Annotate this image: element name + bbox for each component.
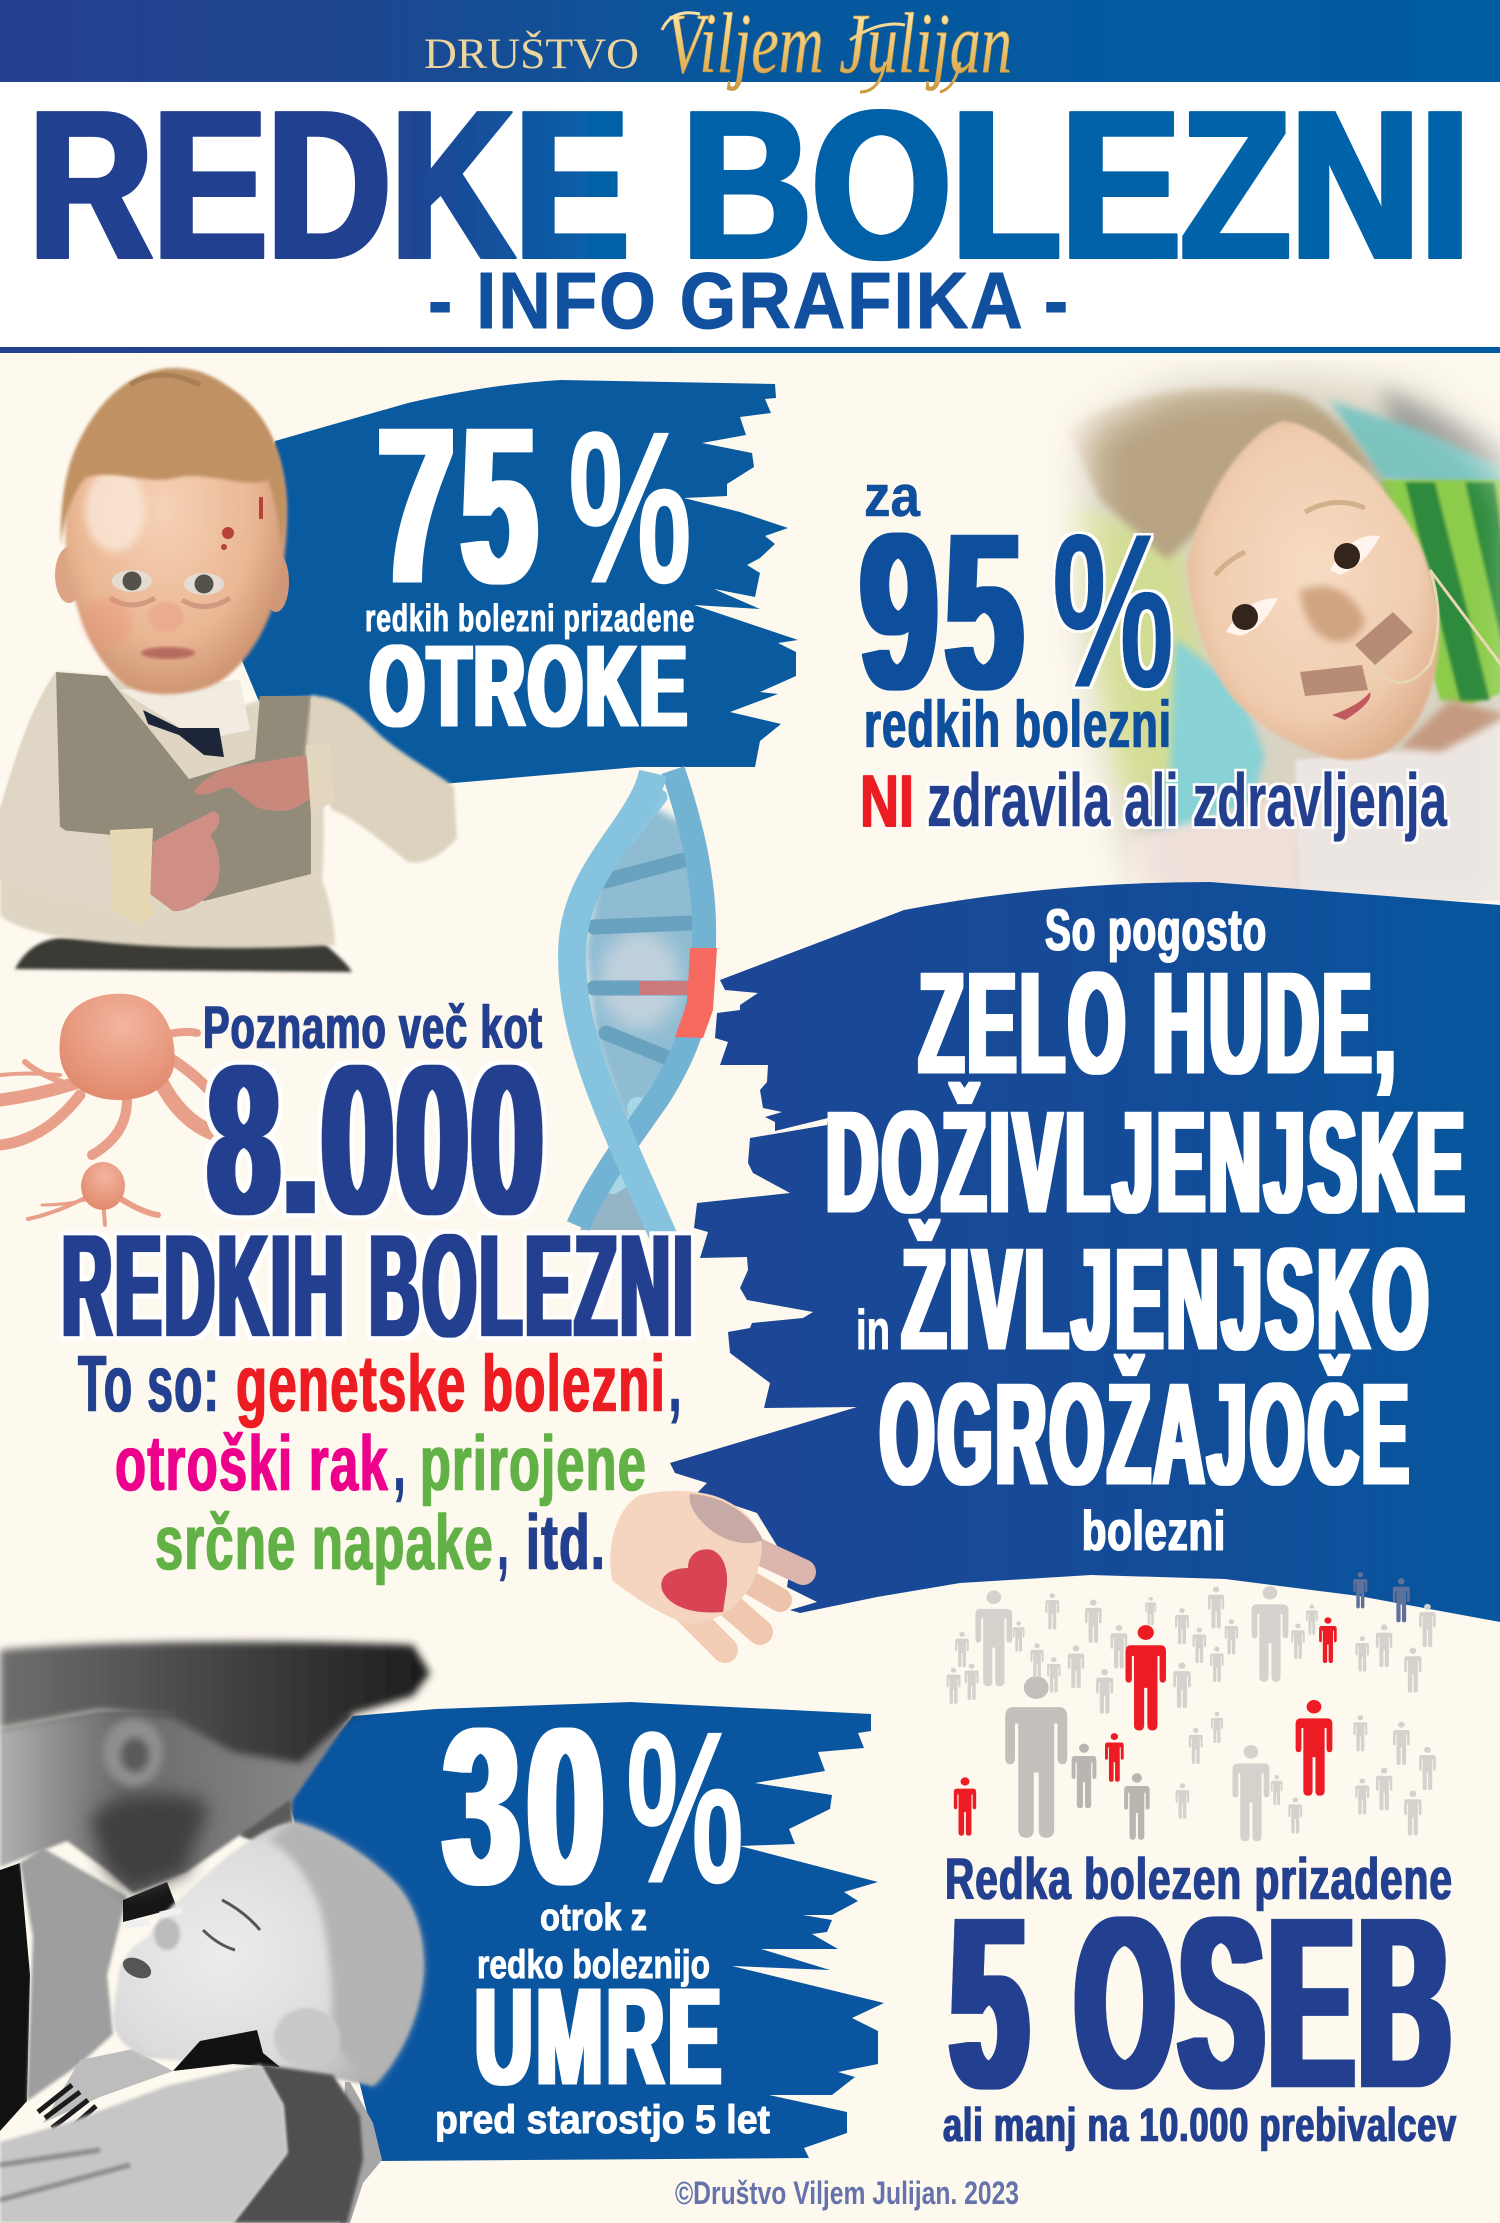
list line 3: srčne napake [155,1498,494,1586]
text block: 8.000 rare diseases [62,994,696,1586]
white title panel [0,82,1500,354]
palm [610,1491,762,1625]
mutated DNA segment [675,948,717,1038]
number: 5: 5 [951,1866,1027,2139]
mouth [141,647,195,659]
hair [0,1642,430,1763]
helix interior [585,800,703,1125]
thumb shadow [690,1494,763,1543]
man's forearm [233,2064,363,2223]
NI: NI [860,762,914,842]
list line 3: itd. [526,1498,606,1586]
teal blanket top [1330,400,1500,490]
black shirt [0,1863,30,2131]
large cell [0,994,213,1155]
eyes [112,570,224,595]
red figures [954,1617,1337,1836]
caption: redkih bolezni [864,687,1172,761]
illustration: cancer cells [0,994,213,1225]
hands [194,755,311,811]
DNA rungs [594,797,690,1183]
main title [29,66,1470,303]
illustration: hand holding heart [610,1491,803,1650]
eyes [1226,536,1380,636]
nose [148,602,184,632]
label: Poznamo več kot: Poznamo več kot [203,994,543,1061]
brush panel: 30 percent [287,1702,884,2161]
gray large figure [1005,1676,1067,1838]
script flourishes [662,13,960,92]
photo: father kissing child [0,1642,430,2223]
neck shadow [1400,700,1500,752]
percent sign: % [568,386,692,628]
man's nose [240,1800,293,1846]
text block: 75 percent [365,382,695,751]
photo: child with skin disease [0,368,457,972]
eye shadows [110,598,230,607]
pale bedding bottom [1132,796,1299,889]
list line 1: , [668,1339,682,1428]
left sleeve [0,672,112,909]
cheeks [84,598,132,646]
list line 3: , [497,1498,509,1586]
list line 2: , [393,1419,406,1507]
figures over brush [1353,1572,1410,1622]
text: REDKIH BOLEZNI [62,1204,696,1367]
forehead highlight [85,468,145,552]
caption: pred starostjo 5 let: pred starostjo 5 let [435,2098,770,2142]
head [65,374,287,694]
baby hair [270,1822,423,2086]
shirt body [0,672,335,948]
mid gray figures [1072,1744,1150,1840]
mouth [1332,692,1370,720]
feeding tube [1370,570,1500,683]
header: title block [0,0,1500,354]
pale green pillow left [1060,500,1210,800]
number: 95: 95 [860,488,1030,736]
stripes [38,2085,96,2138]
caption: redkih bolezni prizadene [365,598,695,640]
percent sign: % [1052,490,1174,733]
collar [173,2030,280,2071]
cuffs [110,828,156,925]
nose shadow [1300,586,1365,642]
nasal tape [1300,612,1413,696]
man's hand [0,2064,287,2223]
baby ear [274,2008,340,2068]
caption: redko boleznijo: redko boleznijo [477,1943,710,1987]
vest [56,672,311,901]
clothing gray [43,2049,173,2123]
number: 30: 30 [443,1683,611,1931]
header rule [0,347,1500,353]
ears [55,547,83,603]
brows [1215,502,1365,575]
number: 8.000: 8.000 [208,1021,546,1258]
word: OTROKE: OTROKE [370,621,690,751]
pictogram: crowd of people [947,1572,1436,1841]
light gray figures [947,1586,1436,1841]
man's sleeve [340,2082,382,2223]
hair [1067,387,1395,560]
label: za: za [864,464,921,529]
percent sign: % [626,1686,744,1928]
heart [661,1549,727,1613]
text block: 95 percent [860,464,1448,842]
small cell [28,1162,158,1225]
So pogosto: So pogosto [1045,898,1267,963]
pants [15,935,352,972]
text block: 5 per 10,000 [943,1847,1457,2151]
brush panel: 75 percent [240,380,798,800]
subtitle: - INFO GRAFIKA - [428,256,1070,345]
list line 2: prirojene [420,1419,647,1507]
photo background [1040,360,1500,900]
text block: 30 percent [435,1683,770,2142]
number: 75: 75 [378,382,544,630]
wounds [221,497,263,550]
bolezni: bolezni [1082,1499,1226,1562]
face [1187,421,1439,760]
right sleeve [305,696,457,863]
jacket [20,1848,127,2101]
word: UMRE: UMRE [475,1960,725,2114]
list line 1: To so: [78,1339,220,1428]
man's face [0,1711,353,1893]
shadowed corner [1376,384,1500,468]
logo: Društvo Viljem Julijan: DRUŠTVO [424,31,639,78]
logo: Društvo Viljem Julijan [424,0,1012,92]
in: in [856,1298,890,1361]
finger shadows [0,2150,130,2200]
main title: REDKE [29,66,629,303]
beard [90,1794,207,1893]
baby nose [154,1918,180,1950]
nasal tape [125,1910,182,1925]
text block: severity [826,898,1468,1562]
copyright: ©Društvo Viljem Julijan. 2023 [675,2175,1019,2211]
baby brow and eye [203,1900,260,1950]
bow tie [143,710,224,757]
DNA strands [578,770,704,1226]
brush panel: severity [670,882,1500,1622]
list line 2: otroški rak [115,1419,389,1507]
fingers [680,1543,803,1650]
hair tuft [130,375,200,385]
icon: DNA helix [572,770,717,1240]
list line 1 [78,1339,682,1428]
dark gap [123,1882,177,1922]
white shirt front [120,680,250,740]
list line 1: genetske bolezni [236,1339,666,1428]
man's ear [103,1718,163,1786]
photo: child with nasal tube [1040,360,1500,900]
white shirt [1295,715,1500,900]
top blue band [0,0,1500,82]
hair [61,368,286,546]
baby mouth [120,1954,154,1982]
caption: otrok z: otrok z [540,1897,647,1939]
teal blanket [1140,638,1265,838]
green striped pillow [1380,480,1500,705]
baby head [113,1822,423,2086]
